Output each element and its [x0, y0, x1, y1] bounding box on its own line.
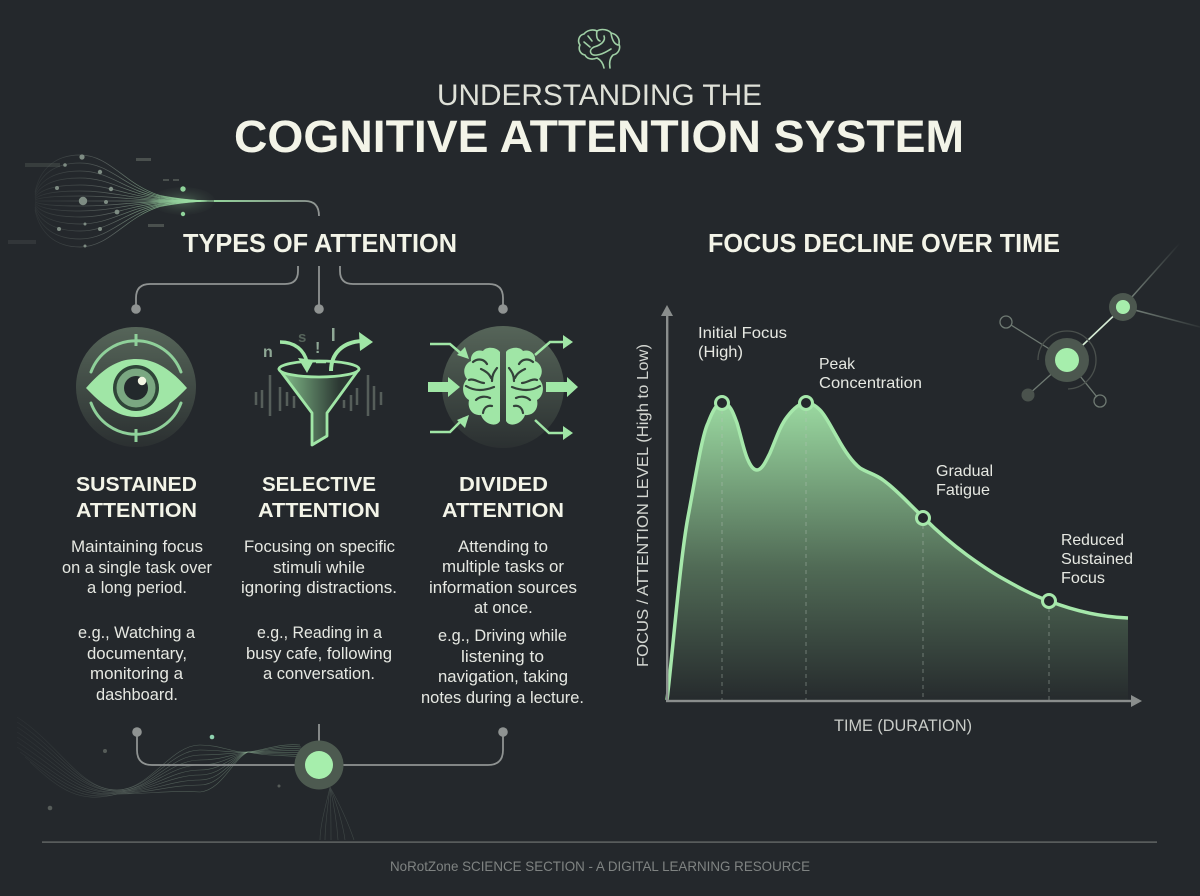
decorative fiber bundle — [8, 154, 215, 248]
column: divided attention — [421, 474, 584, 707]
footer rule — [42, 842, 1157, 843]
column: divided attention: information sources — [429, 579, 577, 597]
label: peak concentration: Peak — [819, 356, 856, 373]
footer text: NoRotZone SCIENCE SECTION - A DIGITAL LEARNING RESOURCE — [390, 858, 810, 874]
column: divided attention: Attending to — [458, 538, 548, 556]
chart: focus decline curve — [635, 305, 1142, 735]
column: sustained attention: Maintaining focus — [71, 538, 203, 556]
heading: focus decline over time: FOCUS DECLINE OVER TIME — [708, 228, 1060, 258]
column: divided attention: multiple tasks or — [442, 558, 565, 576]
icon: network nodes — [1000, 243, 1200, 407]
column: divided attention: DIVIDED — [459, 474, 548, 496]
column: sustained attention: documentary, — [87, 645, 187, 663]
label: gradual fatigue: Gradual — [936, 463, 993, 480]
column: divided attention: ATTENTION — [442, 500, 564, 522]
column: selective attention: a conversation. — [263, 665, 375, 683]
heading: types of attention: TYPES OF ATTENTION — [183, 228, 457, 258]
label: reduced sustained focus: Reduced — [1061, 532, 1124, 549]
column: selective attention: e.g., Reading in a — [257, 624, 383, 642]
title — [234, 79, 964, 162]
label: initial focus — [698, 325, 787, 361]
column: sustained attention: on a single task over — [62, 559, 212, 577]
label: initial focus: (High) — [698, 344, 743, 361]
label: gradual fatigue — [936, 463, 993, 499]
icon: filter funnel: ! — [315, 340, 320, 357]
label: gradual fatigue: Fatigue — [936, 482, 990, 499]
icon: filter funnel: n — [263, 344, 273, 361]
column: sustained attention: SUSTAINED — [76, 474, 197, 496]
icon: divided brain — [428, 326, 578, 448]
column: selective attention: busy cafe, following — [246, 645, 392, 663]
axes — [661, 305, 1142, 707]
icon: filter funnel — [256, 328, 381, 445]
column: divided attention: e.g., Driving while — [438, 627, 567, 645]
icon: eye with target — [76, 327, 196, 447]
column: divided attention: navigation, taking — [438, 668, 568, 686]
icon: small brain — [579, 30, 620, 68]
label: reduced sustained focus: Focus — [1061, 570, 1105, 587]
column: divided attention: at once. — [474, 599, 533, 617]
label: peak concentration: Concentration — [819, 375, 922, 392]
connector: fiber to heading — [214, 201, 319, 216]
column: sustained attention: ATTENTION — [76, 500, 197, 522]
label: reduced sustained focus: Sustained — [1061, 551, 1133, 568]
label: reduced sustained focus — [1061, 532, 1133, 587]
column: selective attention — [241, 474, 397, 683]
y axis label: FOCUS / ATTENTION LEVEL (High to Low) — [635, 344, 652, 667]
column: selective attention: Focusing on specific — [244, 538, 395, 556]
connector: bottom bracket with node — [132, 724, 508, 790]
column: sustained attention — [62, 474, 212, 704]
markers — [716, 396, 1056, 608]
icon: filter funnel: s — [298, 329, 306, 346]
column: sustained attention: a long period. — [87, 579, 187, 597]
column: divided attention: listening to — [461, 648, 544, 666]
title: COGNITIVE ATTENTION SYSTEM — [234, 111, 964, 162]
column: selective attention: SELECTIVE — [262, 474, 376, 496]
column: sustained attention: dashboard. — [96, 686, 178, 704]
column: selective attention: ATTENTION — [258, 500, 380, 522]
x axis label: TIME (DURATION) — [834, 717, 972, 735]
column: sustained attention: e.g., Watching a — [78, 624, 196, 642]
label: initial focus: Initial Focus — [698, 325, 787, 342]
connector: heading to three types — [131, 266, 508, 314]
curve line — [667, 403, 1128, 700]
column: divided attention: notes during a lecture. — [421, 689, 584, 707]
label: peak concentration — [819, 356, 922, 392]
area under curve — [667, 403, 1128, 700]
column: selective attention: ignoring distractions. — [241, 579, 397, 597]
column: selective attention: stimuli while — [273, 559, 365, 577]
decorative wave lines — [17, 717, 354, 840]
title: UNDERSTANDING THE — [437, 79, 762, 112]
column: sustained attention: monitoring a — [90, 665, 184, 683]
